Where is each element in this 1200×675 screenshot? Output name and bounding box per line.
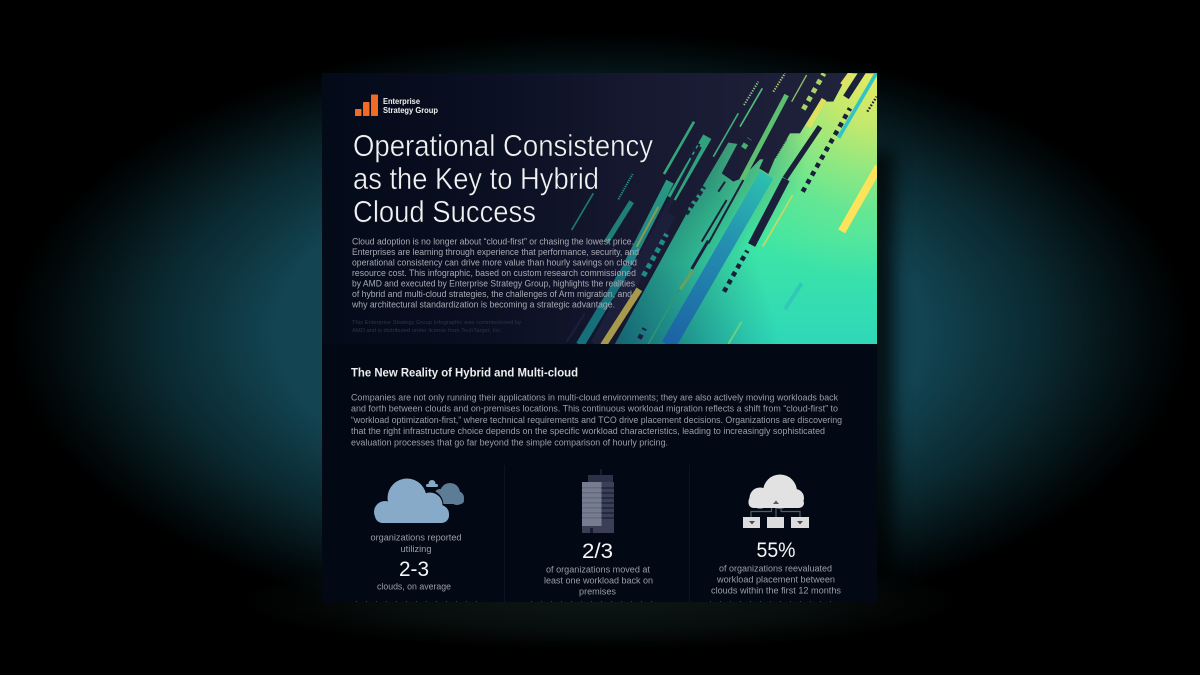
bottom soft glow — [240, 554, 960, 650]
stat label: least one workload back on — [544, 576, 653, 586]
icon: office tower — [582, 469, 614, 533]
icon: clouds — [374, 478, 464, 523]
title — [354, 134, 653, 222]
stat label: of organizations moved at — [546, 564, 650, 576]
diagonal stripe artwork — [567, 72, 880, 345]
sponsorship note: AMD and is distributed under license from TechTarget, Inc. — [352, 328, 502, 334]
intro text block: why architectural standardization is becoming a strategic advantage. — [351, 300, 615, 310]
dark stripes — [567, 313, 585, 342]
stat value: 2/3 — [582, 539, 613, 563]
stat label bottom: clouds, on average — [377, 582, 451, 592]
stat label top — [370, 534, 461, 554]
stat value: 2-3 — [399, 557, 429, 581]
panel: hero banner — [388, 73, 877, 344]
title: as the Key to Hybrid — [353, 161, 599, 196]
icon: cloud network — [743, 474, 809, 528]
panel: stat 2/3 on premises — [544, 469, 653, 598]
stat label top: utilizing — [400, 544, 432, 555]
stat label — [544, 564, 653, 598]
stat label — [711, 565, 841, 594]
stat label: premises — [579, 586, 616, 598]
stat value: 55% — [756, 538, 796, 562]
intro text block: Enterprises are learning through experience that performance, security, and — [352, 247, 639, 258]
infographic page — [322, 72, 880, 602]
intro text block: operational consistency can drive more value than hourly savings on cloud — [352, 258, 637, 268]
title: Operational Consistency — [353, 128, 653, 163]
clipped footnote line tops — [356, 601, 831, 602]
section body text: evaluation processes that go far beyond the simple comparison of hourly pricing. — [351, 438, 668, 448]
intro text block: of hybrid and multi-cloud strategies, the challenges of Arm migration, and — [352, 289, 632, 300]
coloured accents — [643, 234, 667, 276]
logo wordmark: Enterprise — [383, 96, 420, 106]
section body text: Companies are not only running their applications in multi-cloud environments; they are also actively moving workloads back — [351, 392, 838, 404]
icon: orange bars — [355, 94, 378, 116]
title: Cloud Success — [353, 194, 536, 229]
logo wordmark: Strategy Group — [383, 105, 438, 115]
intro text block: by AMD and executed by Enterprise Strategy Group, highlights the realities — [352, 278, 635, 290]
section body text: “workload optimization-first,” where technical requirements and TCO drive placement decisions. Organizations are discovering — [351, 415, 842, 426]
panel: stat 2-3 clouds — [370, 478, 464, 592]
intro text block — [351, 236, 639, 310]
section body text: and forth between clouds and on-premises locations. This continuous workload migration reflects a shift from “cloud-first” to — [351, 404, 838, 414]
section body text: that the right infrastructure choice depends on the specific workload characteristics, leading to increasingly sophisticated — [351, 426, 825, 437]
stat label top: organizations reported — [370, 532, 462, 544]
stat label: clouds within the first 12 months — [711, 586, 841, 596]
logo wordmark — [383, 98, 438, 114]
stat label: workload placement between — [716, 574, 835, 586]
logo: Enterprise Strategy Group — [355, 94, 438, 116]
panel: stat 55% workload placement — [711, 474, 841, 596]
intro text block: resource cost. This infographic, based on custom research commissioned — [352, 268, 636, 279]
section heading: The New Reality of Hybrid and Multi-cloud — [351, 366, 578, 380]
stat label: of organizations reevaluated — [719, 564, 832, 574]
intro text block: Cloud adoption is no longer about “cloud-first” or chasing the lowest price. — [352, 236, 634, 248]
right side shadow of page — [860, 150, 894, 620]
sponsorship note — [352, 320, 521, 334]
sponsorship note: This Enterprise Strategy Group Infographic was commissioned by — [352, 320, 521, 326]
section body text — [351, 392, 842, 448]
